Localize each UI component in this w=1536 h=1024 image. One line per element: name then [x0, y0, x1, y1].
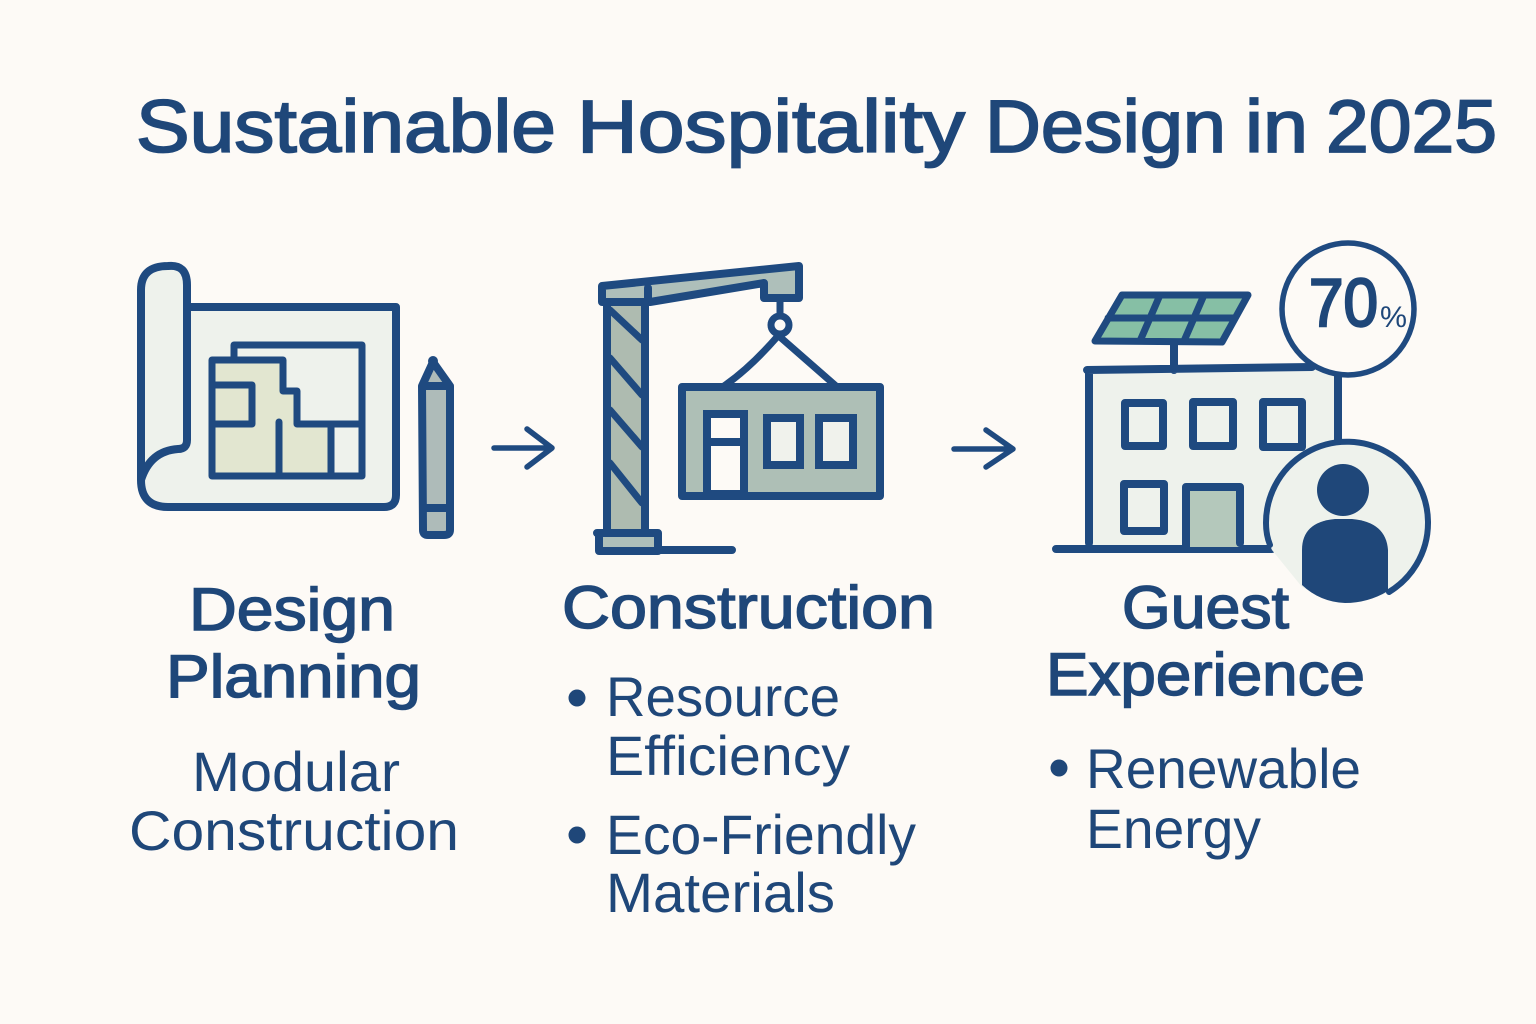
heading: design planning: Design: [189, 576, 395, 643]
arrow: design to construction: [494, 429, 552, 467]
list: construction points: [568, 665, 916, 924]
list: construction points: Eco-Friendly: [606, 803, 916, 866]
panel: construction: [562, 264, 935, 924]
title: Hospitality: [577, 85, 965, 168]
heading: guest experience: Guest: [1122, 574, 1289, 641]
icon: guest avatar: [1266, 442, 1428, 603]
callout: 70% badge: 70: [1309, 265, 1378, 341]
heading: guest experience: Experience: [1046, 641, 1365, 708]
panel: guest experience: [1046, 243, 1428, 860]
list: guest experience points: Energy: [1086, 797, 1261, 860]
heading: design planning: [166, 576, 421, 710]
title: Sustainable: [136, 85, 556, 168]
title: [136, 85, 1497, 168]
title: Design: [985, 85, 1226, 168]
list: construction points: Efficiency: [606, 724, 850, 787]
arrow: construction to guest experience: [954, 430, 1013, 467]
heading: guest experience: [1046, 574, 1365, 708]
list: construction points: Resource: [606, 665, 840, 728]
list: guest experience points: [1050, 737, 1361, 860]
heading: construction: Construction: [562, 574, 935, 641]
heading: design planning: Planning: [166, 643, 421, 710]
icon: blueprint and pencil: [141, 266, 450, 536]
callout: 70% badge: [1282, 243, 1414, 375]
icon: hotel with solar panel: [1056, 295, 1338, 549]
panel: design planning: [129, 266, 459, 862]
icon: crane with module: [597, 264, 880, 552]
text: modular construction: Modular: [192, 740, 400, 803]
callout: 70% badge: %: [1380, 301, 1407, 334]
list: guest experience points: Renewable: [1086, 737, 1361, 800]
title: in: [1245, 85, 1308, 168]
title: 2025: [1326, 85, 1497, 168]
text: modular construction: [129, 740, 459, 862]
text: modular construction: Construction: [129, 799, 459, 862]
list: construction points: Materials: [606, 861, 835, 924]
